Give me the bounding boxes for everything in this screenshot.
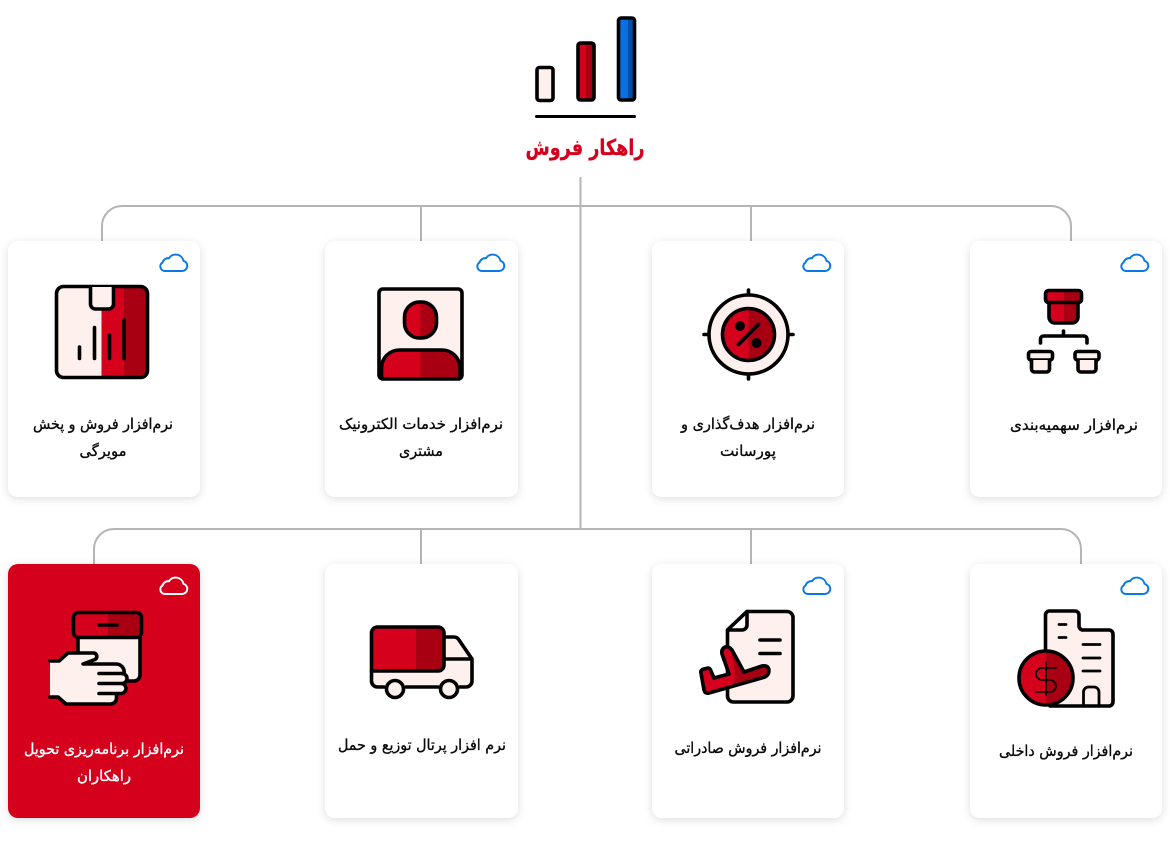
label: راهکاران <box>77 767 131 785</box>
icon: cloud <box>477 255 504 271</box>
icon: box with bars <box>56 286 148 378</box>
icon: percent target <box>704 290 793 379</box>
icon: cloud <box>160 255 187 271</box>
panel: domestic sales software <box>970 564 1162 818</box>
icon: building with dollar coin <box>1019 611 1113 706</box>
icon: cloud <box>803 578 830 594</box>
icon: allocation hierarchy <box>1028 290 1099 372</box>
icon: cloud <box>1121 255 1148 271</box>
panel: distribution and transport portal software <box>325 564 518 818</box>
icon: cloud <box>803 255 830 271</box>
label <box>24 740 184 785</box>
label: نرم افزار پرتال توزیع و حمل <box>338 736 506 755</box>
title: راهکار فروش <box>526 136 644 161</box>
label <box>339 415 503 460</box>
label: نرم‌افزار فروش صادراتی <box>674 739 822 757</box>
panel: export sales software <box>652 564 844 818</box>
icon: export document and plane <box>701 612 793 702</box>
panel: dealer delivery planning software (highlighted) <box>8 564 200 818</box>
panel: quota allocation software <box>970 241 1162 497</box>
icon: hand holding box <box>50 612 142 704</box>
label: نرم‌افزار فروش و پخش <box>33 415 173 434</box>
label: نرم‌افزار هدف‌گذاری و <box>680 415 815 433</box>
label <box>33 415 173 460</box>
panel: goal setting and commission software <box>652 241 844 497</box>
label: مویرگی <box>80 442 126 460</box>
label <box>680 415 815 461</box>
icon: sales bar chart <box>536 18 634 116</box>
label: نرم‌افزار فروش داخلی <box>999 742 1133 760</box>
panel: customer e-service software <box>325 241 518 497</box>
label: نرم‌افزار خدمات الکترونیک <box>339 415 503 433</box>
label: نرم‌افزار سهمیه‌بندی <box>1010 416 1138 434</box>
label: پورسانت <box>720 442 776 461</box>
panel: capillary sales and distribution software <box>8 241 200 497</box>
label: مشتری <box>399 442 443 460</box>
icon: delivery truck <box>372 627 472 698</box>
icon: cloud <box>1121 578 1148 594</box>
label: نرم‌افزار برنامه‌ریزی تحویل <box>24 740 184 758</box>
icon: customer portrait <box>379 289 462 379</box>
icon: cloud <box>160 578 187 594</box>
connector lines <box>94 177 1081 564</box>
